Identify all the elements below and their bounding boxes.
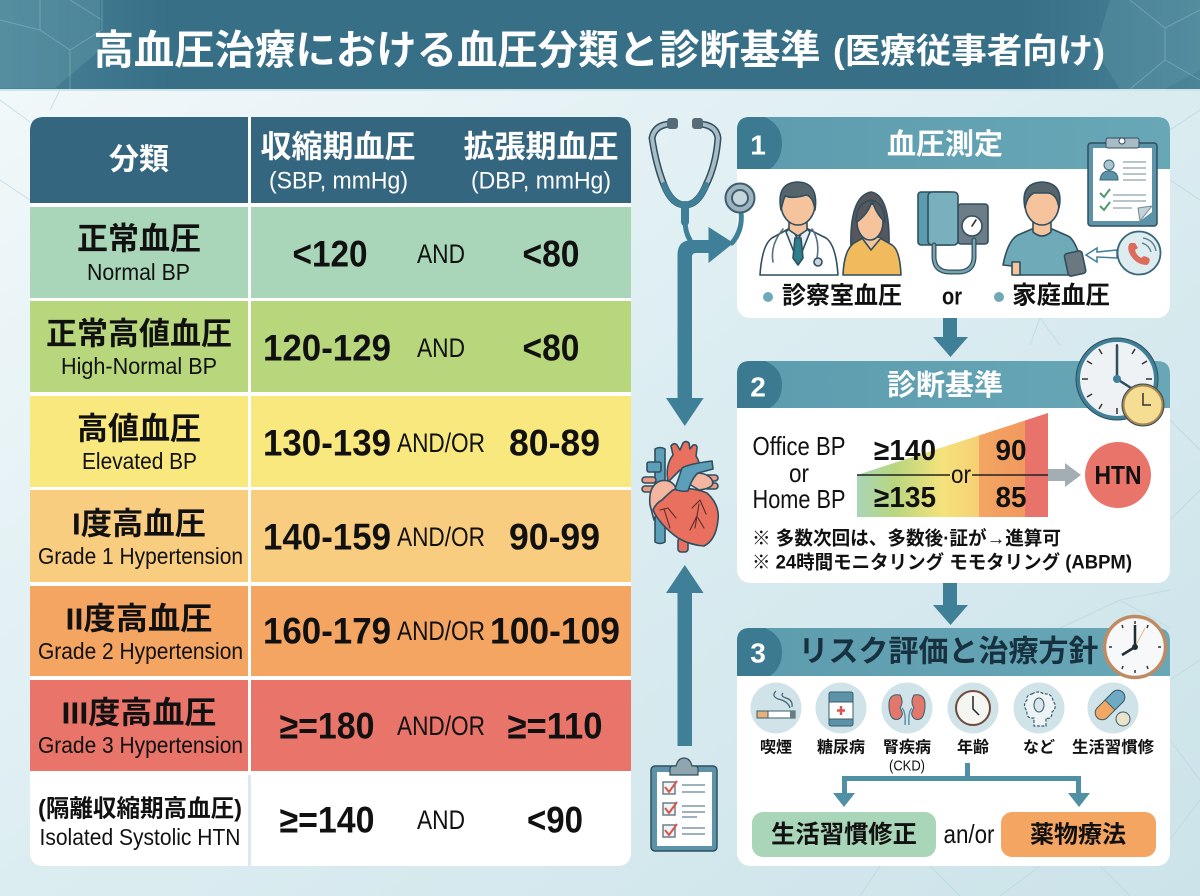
arrow: up to heart [666, 565, 704, 746]
treatment: medication: 薬物療法 [1030, 822, 1126, 848]
row: high-normal BP: AND [417, 333, 465, 363]
arrow: branching to treatments [833, 763, 1090, 807]
table header [30, 117, 631, 203]
row: isolated systolic hypertension [30, 775, 583, 866]
arrow: down to heart [666, 398, 704, 426]
chart: threshold wedge [857, 413, 1048, 517]
chart: threshold wedge: 85 [996, 482, 1026, 514]
row: high-normal BP: 120-129 [263, 328, 391, 368]
icon: patient with arm cuff [1003, 182, 1086, 277]
notes: ※ 24時間モニタリング モモタリング (ABPM) [752, 550, 1132, 574]
row: grade 3 hypertension: AND/OR [397, 711, 485, 741]
chart: threshold wedge: or [951, 461, 971, 489]
risk factor: smoking: 喫煙 [760, 738, 792, 756]
label: office BP: 診察室血圧 [782, 282, 902, 310]
row: grade 2 hypertension [30, 586, 631, 676]
row: grade 1 hypertension: 140-159 [263, 516, 391, 558]
label: home BP: 家庭血圧 [1012, 282, 1110, 310]
icon: patient record clipboard [1088, 138, 1157, 226]
row: grade 3 hypertension [30, 680, 631, 771]
risk factor: diabetes: 糖尿病 [817, 738, 865, 756]
row: grade 1 hypertension: I度高血圧 [72, 506, 206, 542]
treatment: medication [1001, 812, 1156, 857]
icon: phone transfer arrow [1086, 248, 1117, 262]
row: isolated systolic hypertension: ≥=140 [280, 800, 374, 840]
label: office or home BP: Office BP [752, 431, 846, 461]
label: office or home BP: Home BP [752, 484, 846, 514]
arrow: to step 1 [678, 227, 734, 398]
subtitle: (医療従事者向け) [833, 33, 1105, 71]
row: grade 1 hypertension: 90-99 [509, 516, 600, 558]
risk factor: kidney disease [882, 682, 932, 774]
step 2 header [737, 361, 1170, 408]
notes [752, 526, 1132, 574]
row: grade 1 hypertension: AND/OR [397, 522, 485, 552]
treatment: lifestyle modification: 生活習慣修正 [771, 822, 917, 848]
step 1 header: 1 [750, 130, 766, 160]
panel: blood pressure classification table [30, 117, 631, 866]
icon: stethoscope [652, 118, 754, 243]
row: grade 2 hypertension: AND/OR [397, 616, 485, 646]
arrow: step 2 to step 3 [933, 583, 968, 625]
row: high-normal BP: 正常高値血圧 [46, 316, 232, 352]
step 2 header: 診断基準 [887, 369, 1003, 402]
table header: 拡張期血圧 [464, 130, 618, 164]
step 3 header [737, 628, 1170, 676]
row: grade 2 hypertension: Grade 2 Hypertension [38, 638, 243, 664]
table header: 収縮期血圧 [260, 130, 416, 164]
step 3 header: リスク評価と治療方針 [798, 636, 1098, 668]
icon: clocks [1076, 338, 1164, 426]
HTN badge [1085, 442, 1151, 508]
row: normal BP [30, 207, 631, 298]
panel: step 2 diagnostic criteria [737, 338, 1170, 583]
label: office or home BP [752, 431, 846, 514]
header banner [0, 0, 1200, 91]
risk factor: others [1014, 682, 1064, 756]
icon: doctor [760, 182, 838, 275]
chart: threshold wedge: 90 [996, 435, 1026, 467]
risk factor: lifestyle habits [1072, 682, 1154, 756]
row: elevated BP: 高値血圧 [77, 412, 201, 446]
step 1 header [737, 117, 1170, 169]
row: grade 1 hypertension [30, 490, 631, 582]
icon: phone [1118, 232, 1160, 274]
row: high-normal BP: High-Normal BP [61, 353, 217, 379]
row: isolated systolic hypertension: AND [417, 805, 465, 835]
icon: checklist clipboard [651, 758, 717, 851]
table header: (SBP, mmHg) [269, 168, 408, 194]
row: high-normal BP [30, 301, 631, 392]
risk factor: diabetes [816, 682, 866, 756]
chart: threshold wedge: ≥135 [874, 482, 936, 514]
row: normal BP: Normal BP [87, 259, 190, 285]
row: grade 2 hypertension: 160-179 [263, 610, 391, 652]
row: normal BP: <80 [522, 234, 580, 274]
chart: threshold wedge: ≥140 [874, 435, 936, 467]
risk factor: kidney disease: 腎疾病 [883, 738, 931, 756]
row: grade 2 hypertension: II度高血圧 [66, 602, 212, 636]
row: elevated BP: AND/OR [397, 428, 485, 458]
row: normal BP: AND [417, 239, 465, 269]
HTN badge: HTN [1094, 460, 1142, 490]
icon: woman [843, 192, 901, 275]
row: grade 3 hypertension: ≥=180 [280, 706, 374, 746]
table header: 分類 [109, 144, 169, 176]
step 1 header: 血圧測定 [887, 128, 1003, 161]
row: isolated systolic hypertension: (隔離収縮期高血圧) [38, 796, 242, 822]
icon: heart [642, 442, 718, 552]
row: normal BP: <120 [292, 234, 368, 274]
notes: ※ 多数次回は、多数後·証が→進算可 [752, 526, 1061, 550]
row: elevated BP: 130-139 [263, 422, 391, 464]
label: office or home BP: or [789, 458, 809, 488]
arrow: to HTN [1048, 463, 1081, 487]
row: isolated systolic hypertension: <90 [527, 800, 583, 840]
row: grade 3 hypertension: ≥=110 [508, 706, 602, 746]
row: elevated BP [30, 396, 631, 487]
arrow: step 1 to step 2 [933, 318, 968, 357]
table header: (DBP, mmHg) [471, 168, 611, 194]
risk factor: lifestyle habits: 生活習慣修 [1072, 738, 1154, 756]
row: high-normal BP: <80 [522, 328, 580, 368]
row: normal BP: 正常血圧 [77, 222, 201, 256]
step 3 header: 3 [750, 638, 766, 668]
step 2 header: 2 [750, 372, 766, 402]
panel: step 3 risk assessment and treatment policy [737, 616, 1170, 866]
label: and/or: an/or [944, 819, 995, 849]
panel: step 1 blood pressure measurement [737, 117, 1170, 318]
risk factor: kidney disease: (CKD) [889, 758, 925, 774]
label: or: or [942, 284, 962, 310]
risk factor: others: など [1023, 738, 1055, 756]
treatment: lifestyle modification [752, 812, 936, 857]
icon: blood pressure cuff [918, 192, 988, 272]
risk factor: smoking [750, 682, 802, 756]
risk factor: age [948, 682, 998, 756]
row: grade 2 hypertension: 100-109 [490, 610, 620, 652]
row: isolated systolic hypertension: Isolated Systolic HTN [40, 824, 240, 850]
row: grade 1 hypertension: Grade 1 Hypertension [38, 543, 243, 569]
icon: wall clock [1104, 616, 1166, 678]
row: grade 3 hypertension: III度高血圧 [62, 696, 216, 730]
risk factor: age: 年齢 [957, 738, 989, 756]
title: 高血圧治療における血圧分類と診断基準 [93, 27, 821, 73]
row: elevated BP: Elevated BP [82, 448, 197, 474]
row: grade 3 hypertension: Grade 3 Hypertension [38, 732, 243, 758]
row: elevated BP: 80-89 [509, 422, 600, 464]
